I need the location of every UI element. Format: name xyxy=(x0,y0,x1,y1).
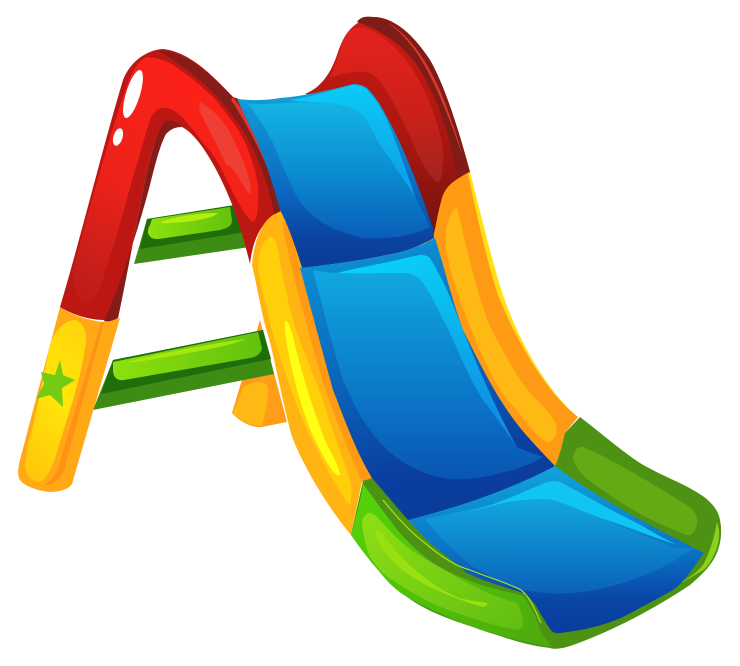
top section cyan highlight xyxy=(290,85,415,197)
right green rail xyxy=(555,417,721,645)
bottom section cyan highlight xyxy=(472,481,678,545)
icon: green star xyxy=(36,360,75,407)
leg inner yellow panel xyxy=(25,320,86,482)
middle section mid panel xyxy=(313,270,543,479)
arch bright body xyxy=(73,57,258,302)
arch bright body xyxy=(330,27,443,182)
slide middle section: blue xyxy=(300,238,562,530)
left leg: yellow xyxy=(18,307,120,492)
middle section cyan highlight xyxy=(337,255,517,447)
arch dark outer band xyxy=(357,17,470,180)
left yellow rail xyxy=(252,209,400,535)
right red arch xyxy=(305,17,470,240)
slide top section: blue xyxy=(237,84,434,268)
arch outer dark band xyxy=(157,50,284,214)
right yellow rail xyxy=(425,172,578,468)
lip edge highlight line xyxy=(383,500,541,623)
slide bottom section: blue xyxy=(383,466,704,633)
bottom section mid panel xyxy=(425,499,693,593)
back support foot xyxy=(232,320,287,427)
top section mid panel xyxy=(247,102,430,238)
left red arch xyxy=(60,49,300,321)
arch dark inner band xyxy=(104,121,182,321)
right rail golden panel xyxy=(445,207,557,442)
highlight: glossy marks xyxy=(119,68,147,120)
green lip lozenge xyxy=(362,513,523,630)
left green rail and slide lip xyxy=(351,478,575,649)
arch pink highlight xyxy=(199,102,251,194)
right rail lozenge xyxy=(573,447,697,535)
left rail yellow panel xyxy=(258,237,351,505)
lower green rung xyxy=(93,330,274,410)
top green rung xyxy=(134,205,250,264)
left rail orange stripe xyxy=(282,222,372,482)
